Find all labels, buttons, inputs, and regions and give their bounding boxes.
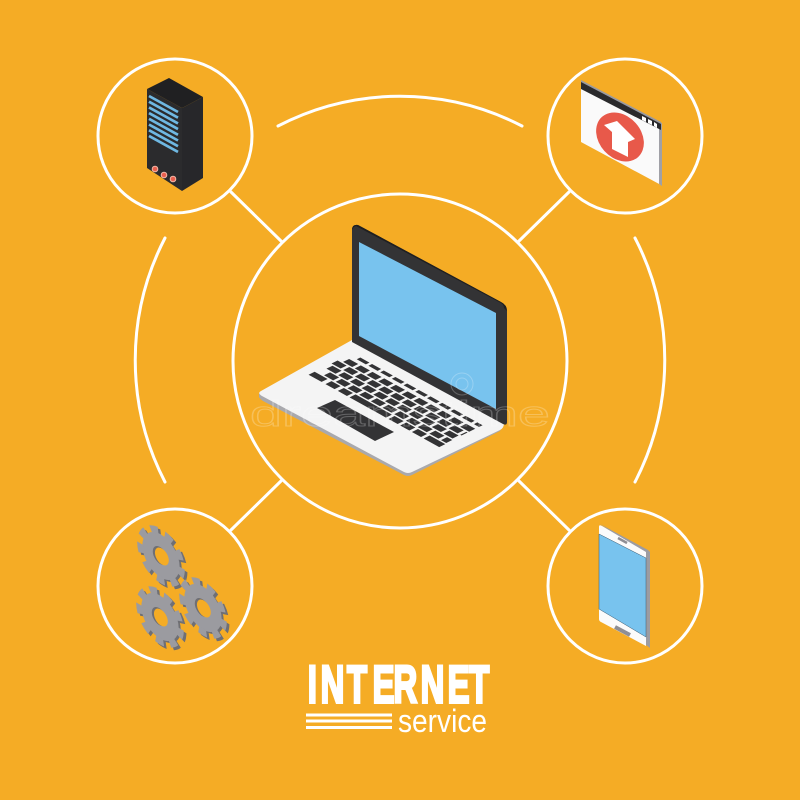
icon: laptop: [259, 225, 507, 476]
upload badge: [586, 103, 654, 171]
window title bar: [581, 81, 661, 130]
title underline stripes: [306, 715, 392, 728]
phone body: [599, 525, 646, 646]
gear bottom left: [139, 581, 183, 656]
circle: browser window: [548, 59, 702, 213]
icon: server tower: [147, 78, 203, 191]
server right face: [182, 97, 203, 191]
icon: smartphone: [599, 524, 650, 648]
circle: gears: [98, 509, 252, 663]
central circle: [233, 194, 567, 528]
phone side: [600, 524, 650, 648]
laptop lid top edge: [352, 225, 507, 311]
icon: gears: [139, 520, 226, 656]
window top edge: [581, 80, 661, 124]
keyboard: [312, 354, 482, 446]
title: INTERNET: INTERNET: [308, 656, 489, 715]
circle: server: [98, 59, 252, 213]
server top face: [147, 78, 203, 108]
server vent stripes: [149, 96, 178, 152]
window page: [581, 81, 661, 185]
title: service: service: [398, 703, 487, 739]
network connector lines and arcs: [135, 96, 665, 530]
laptop base deck: [259, 340, 504, 473]
touchpad: [317, 400, 394, 441]
circle: smartphone: [548, 509, 702, 663]
phone speaker: [618, 538, 627, 543]
phone home button: [615, 627, 630, 635]
watermark: [250, 373, 550, 434]
window side edge: [659, 122, 662, 186]
upload arrow: [604, 121, 635, 157]
server status lights: [152, 166, 176, 182]
title: [306, 656, 489, 739]
gear bottom right: [182, 572, 226, 646]
gear top: [140, 520, 184, 594]
window buttons: [642, 116, 657, 128]
laptop base edge: [259, 393, 502, 476]
laptop screen: [359, 242, 496, 409]
watermark: dreamstime: [250, 393, 550, 434]
phone screen: [599, 534, 646, 637]
server left face: [147, 89, 182, 191]
laptop lid: [352, 225, 507, 425]
icon: browser window with upload arrow: [581, 80, 662, 186]
